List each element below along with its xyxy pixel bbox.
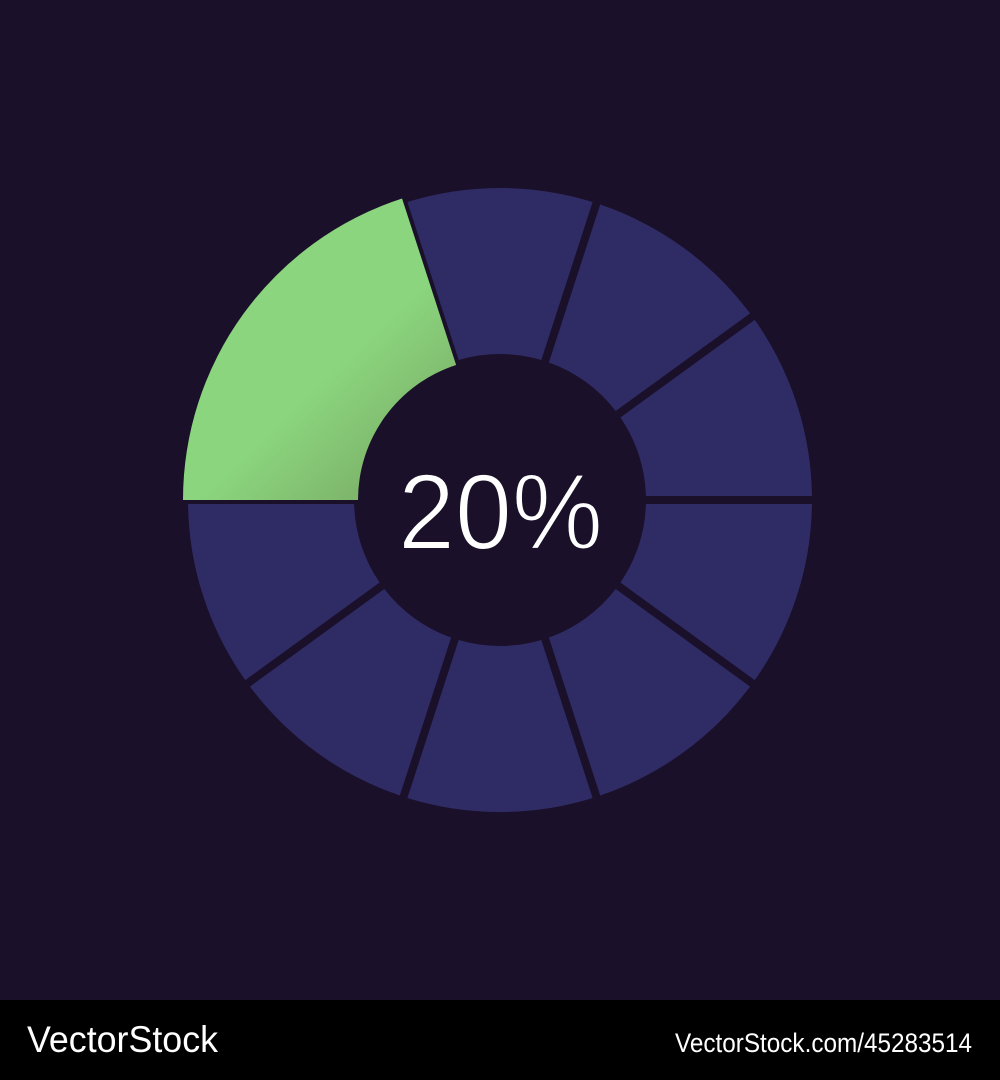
segment: remaining 7 bbox=[242, 559, 493, 807]
footer bar bbox=[0, 1000, 1000, 1080]
segment: remaining 6 bbox=[407, 640, 593, 812]
segment: remaining 8 bbox=[175, 455, 395, 684]
footer logo text: VectorStock bbox=[27, 1019, 218, 1060]
segment: highlighted 20% bbox=[183, 198, 456, 500]
footer image id: VectorStock.com/45283514 bbox=[675, 1028, 972, 1058]
donut chart bbox=[175, 188, 825, 812]
segment: remaining 5 bbox=[507, 559, 758, 807]
segment: remaining 3 bbox=[605, 316, 825, 545]
segment: remaining 4 bbox=[605, 455, 825, 684]
segment: remaining 2 bbox=[507, 193, 758, 441]
center value: 20%: 20% bbox=[398, 451, 603, 572]
segment: remaining 1 bbox=[407, 188, 593, 360]
